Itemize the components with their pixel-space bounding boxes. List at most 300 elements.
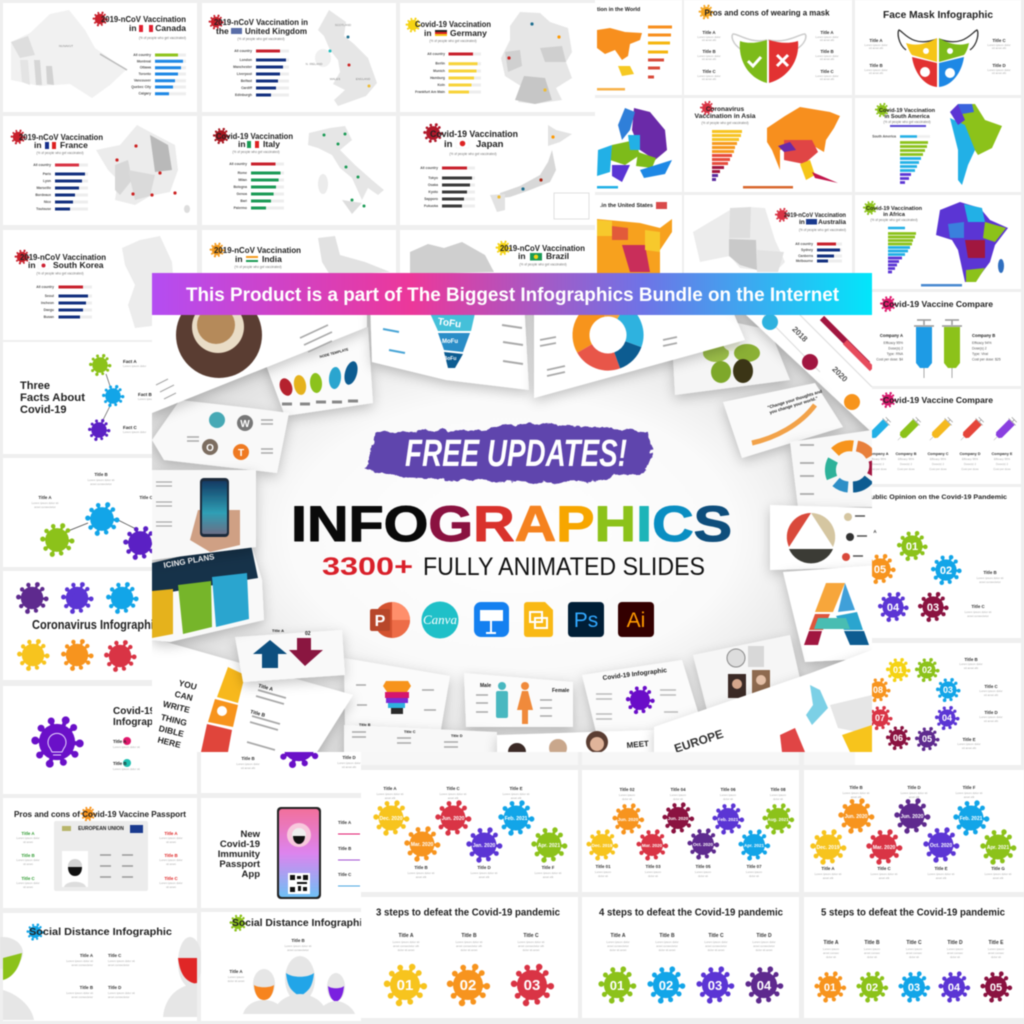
labels: 4 steps: dolor sit amet — [708, 948, 725, 952]
map: United Kingdom: N. IRELAND — [306, 62, 323, 66]
labels: face mask: sit amet elit — [869, 46, 883, 50]
title: vaccine compare: Covid-19 Vaccine Compare — [883, 299, 993, 309]
labels: seven titles: Lorem ipsum dolor sit — [928, 872, 955, 876]
labels: 4 steps: amet consectetur — [753, 944, 775, 948]
slide: vaccination in Japan — [400, 116, 595, 225]
labels: companies: Company A — [868, 452, 889, 456]
labels: 5 steps: amet consec — [947, 951, 964, 955]
bar chart: Asia — [712, 132, 742, 180]
title: Asia: Vaccination in Asia — [694, 113, 756, 120]
labels: seven titles: Lorem ipsum dolor sit — [815, 872, 842, 876]
title: United Kingdom: the — [216, 26, 229, 36]
mini slide: male and female — [464, 673, 573, 727]
labels: mask right: Lorem ipsum dolor — [815, 35, 839, 39]
labels: six titles: amet elit — [511, 796, 522, 800]
map: United States — [597, 219, 672, 280]
timeline viruses: Aug. 2021 — [767, 817, 789, 822]
labels: social distance: Title A — [80, 953, 94, 958]
title: Asia: (% of people who get vaccinated) — [701, 121, 749, 125]
map: world — [597, 28, 642, 76]
mini slide: triangle circle — [770, 505, 872, 570]
bar chart: France: All country — [33, 163, 51, 167]
bar chart: Japan: All country — [420, 166, 438, 170]
mini slide: lower center: Title D — [451, 734, 463, 738]
labels: companies: Efficacy 95% — [870, 457, 887, 461]
mini slide: funnel: ToFu — [437, 316, 462, 331]
title: Covid-19 infographic: Infographic — [113, 717, 168, 728]
mini slide: pricing plans — [152, 540, 264, 642]
labels: companies: Dose(s) 2 — [996, 462, 1009, 466]
virus steps: 4: 04 — [757, 978, 772, 993]
labels: eight titles: Title 02 — [619, 787, 635, 792]
labels: cons: Title C — [164, 876, 178, 881]
mini slide: funnel — [370, 300, 529, 390]
title: South America — [879, 108, 936, 124]
virus steps: 3 — [384, 964, 554, 1006]
labels: lower titles: sit amet elit — [342, 765, 356, 769]
labels: facts: Fact B — [138, 392, 153, 397]
virus steps: 5: 02 — [866, 982, 878, 994]
labels: seven titles: Lorem ipsum dolor sit — [901, 791, 928, 795]
labels: cons: Title A — [164, 831, 178, 836]
labels: companies: Cost per dose — [929, 467, 947, 471]
bar chart: France: Paris — [43, 172, 51, 176]
labels: face mask: Title B — [869, 63, 883, 68]
labels: 3 steps: Lorem ipsum dolor sit — [456, 940, 483, 944]
labels: 4 steps: dolor sit amet — [659, 948, 676, 952]
labels: mask left: Lorem ipsum dolor — [697, 35, 721, 39]
labels: eight step cycle: Title D — [984, 710, 998, 715]
map: Africa — [936, 202, 1008, 282]
labels: companies: Company C — [927, 452, 949, 456]
labels: companies: Cost per dose — [961, 467, 979, 471]
labels: mask right — [815, 30, 839, 81]
title: three facts: Three — [20, 380, 50, 392]
virus steps: 3: 03 — [524, 977, 540, 994]
labels: face mask: Lorem ipsum dolor — [864, 68, 888, 72]
bar chart: Italy: Palermo — [234, 206, 247, 210]
icon: green virus — [40, 523, 74, 557]
map: Canada — [11, 10, 127, 98]
bar chart: South America: South America — [872, 134, 896, 138]
bar chart: Canada: Calgary — [139, 92, 151, 96]
labels: 4 steps — [606, 933, 776, 952]
labels: companies: Dose(s) 2 — [964, 462, 977, 466]
title: wearing a mask: Pros and cons of wearing a mask — [704, 8, 830, 18]
labels: seven titles: Title A — [821, 866, 835, 871]
slide: eight step virus cycle — [855, 643, 1021, 765]
virus cycle: eight steps: 08 — [873, 685, 883, 695]
bar chart: Japan: Kyoto — [428, 190, 438, 194]
title: South Korea: in — [28, 260, 36, 270]
labels: titles: amet consectetur — [90, 482, 112, 486]
bar chart: Japan: Fukuoka — [424, 204, 438, 208]
labels: seven titles: amet elit — [851, 795, 862, 799]
mini slide: light bulb — [344, 658, 450, 735]
bar chart: Japan: Osaka — [428, 183, 438, 187]
bar chart: Italy: Bari — [240, 199, 247, 203]
person: orange mask — [243, 969, 285, 1014]
labels: eight titles: Lorem ipsum — [770, 793, 787, 797]
bar chart: Australia: Melbourne — [796, 259, 813, 263]
icon: Photoshop — [568, 602, 604, 637]
labels: companies: Dose(s) 2 — [872, 462, 885, 466]
labels: eight step cycle: Title E — [962, 737, 976, 742]
virus cycle: five steps: 01 — [906, 541, 918, 553]
labels: dots: Title A — [113, 739, 127, 744]
labels: eight step cycle: sit amet elit — [962, 746, 976, 750]
bar chart: Japan: Sapporo — [424, 197, 438, 201]
phone: immunity passport — [277, 807, 321, 899]
title: France: in — [34, 140, 42, 150]
labels: mask left: Title B — [702, 49, 716, 54]
labels: pros: Title C — [21, 876, 35, 881]
person: green mask — [0, 937, 34, 1020]
title: France: (% of people who get vaccinated) — [36, 151, 84, 155]
labels: 5 steps: dolor sit — [826, 955, 836, 959]
title: Japan — [430, 129, 518, 156]
labels: company A: Dose(s) 2 — [888, 346, 903, 350]
map: United Kingdom: SCOTLAND — [335, 23, 352, 27]
labels: mask right: sit amet elit — [820, 57, 834, 61]
title: 4 steps: 4 steps to defeat the Covid-19 pandemic — [599, 908, 783, 918]
band: slide ends under panel — [361, 752, 855, 765]
virus steps: 4: 02 — [659, 978, 673, 993]
title: Australia: in — [799, 219, 805, 226]
mini slide: you can write: CAN — [174, 689, 194, 703]
labels: six titles: Lorem ipsum dolor sit — [535, 871, 562, 875]
labels: lower titles: Title D — [342, 755, 356, 760]
labels: titles: Lorem ipsum — [228, 975, 245, 979]
labels: cons — [159, 831, 183, 889]
icon: blue virus — [85, 502, 119, 536]
title: vaccine compare: Covid-19 Vaccine Compare — [883, 395, 993, 405]
mini slide: SWOT: T — [238, 448, 244, 459]
title: Italy: in — [238, 139, 246, 149]
icon: Illustrator — [618, 602, 654, 637]
icon: purple virus — [276, 722, 323, 768]
labels: companies: Efficacy 95% — [962, 457, 979, 461]
labels: six titles: Title C — [446, 786, 460, 791]
labels: mask left: Lorem ipsum dolor — [697, 54, 721, 58]
title: Canada: (% of people who get vaccinated) — [139, 36, 186, 40]
labels: company B: Dose(s) 2 — [972, 346, 987, 350]
map: United Kingdom: WALES — [330, 77, 340, 81]
labels: public opinion: amet consectetur — [967, 614, 989, 618]
title: Australia: Australia — [818, 219, 846, 226]
mini slide: green petals — [672, 315, 790, 395]
slide: coronavirus vaccination in Asia — [684, 98, 852, 192]
title: Brazil: Brazil — [546, 251, 569, 261]
bar chart: France: Marseille — [36, 186, 51, 190]
timeline viruses: Dec. 2019 — [816, 845, 840, 851]
labels: 5 steps: Lorem ipsum — [864, 947, 881, 951]
labels: six titles — [377, 786, 562, 879]
labels: six titles: Lorem ipsum dolor sit — [503, 792, 530, 796]
icon: orange virus — [81, 807, 96, 821]
slide: vaccination in India — [202, 230, 396, 280]
slide: vaccination in the World — [595, 0, 682, 95]
mini slide: you can write: Title B — [249, 709, 266, 719]
virus steps: 4: 03 — [708, 978, 722, 993]
slide: vaccination in Australia — [684, 195, 852, 280]
slide: pros and cons of vaccine passport — [3, 798, 197, 908]
labels: titles: Title A — [38, 495, 52, 500]
labels: 5 steps: Title B — [864, 940, 880, 946]
title: Japan: Covid-19 Vaccination — [430, 129, 518, 140]
labels: 4 steps: Title D — [756, 933, 772, 939]
labels: companies: Dose(s) 2 — [932, 462, 945, 466]
title: 5 steps: 5 steps to defeat the Covid-19 pandemic — [821, 908, 1005, 918]
labels: social distance: Lorem ipsum dolor sit — [108, 959, 135, 963]
labels: mask left: Title C — [702, 69, 716, 74]
mini slide: SWOT: O — [206, 443, 214, 454]
labels: companies: Cost per dose — [993, 467, 1011, 471]
slide: social distance infographic right — [201, 912, 368, 1021]
labels: 4 steps: Lorem ipsum dolor — [752, 940, 776, 944]
icon: blue virus — [27, 924, 44, 940]
labels: pros: sit amet — [23, 885, 33, 889]
labels: seven titles: amet elit — [823, 876, 834, 880]
card: European Union passport — [54, 821, 148, 891]
labels: company B: Cost per dose: $25 — [972, 358, 1001, 362]
labels: 4 steps: amet consectetur — [607, 944, 629, 948]
bar chart: United Kingdom: Cardiff — [241, 86, 253, 90]
bar chart: Australia — [795, 242, 842, 263]
bar chart: South Korea: Busan — [44, 315, 54, 319]
icon: purple virus with bulb — [31, 716, 84, 768]
labels: six titles: Lorem ipsum dolor sit — [377, 792, 404, 796]
labels: eight titles: Title 03 — [645, 864, 661, 869]
labels: 5 steps: Title E — [989, 940, 1004, 946]
mini slide: pins — [263, 327, 373, 416]
labels: 5 steps: dolor sit — [867, 955, 877, 959]
title: Brazil: (% of people who get vaccinated) — [519, 262, 567, 266]
title: Italy: Italy — [263, 139, 280, 149]
map: Japan — [490, 125, 589, 219]
labels: company A: Company A — [880, 333, 903, 338]
map: Brazil — [410, 242, 494, 274]
labels: mask left: Title A — [702, 30, 716, 35]
icon: green syringe — [942, 320, 962, 378]
labels: seven titles: amet elit — [964, 795, 975, 799]
bar chart: Canada — [131, 53, 186, 96]
labels: pros: Lorem ipsum dolor — [16, 836, 40, 840]
labels: 3 steps — [393, 933, 545, 952]
labels: titles: Title B — [291, 938, 305, 943]
mini slide: lower center: Title B — [359, 723, 371, 727]
labels: pros: Title A — [21, 831, 35, 836]
person: purple mask — [318, 973, 355, 1014]
virus steps: 3: 01 — [397, 977, 413, 994]
labels: face mask: Title A — [869, 38, 883, 43]
title: Australia — [784, 212, 846, 232]
labels: 4 steps: Lorem ipsum dolor — [606, 940, 630, 944]
timeline viruses — [586, 802, 794, 861]
labels: pros: sit amet — [23, 862, 33, 866]
labels: face mask: sit amet elit — [869, 71, 883, 75]
labels: passport app: Title C — [338, 872, 352, 877]
bar chart: United Kingdom: All country — [234, 49, 252, 53]
labels: cons: sit amet — [166, 885, 176, 889]
virus cycle: five steps: 04 — [887, 602, 900, 614]
labels: mask left: sit amet elit — [702, 77, 716, 81]
mini slide: arrows: Title A — [272, 628, 284, 633]
bar chart: South Korea: All country — [36, 285, 54, 289]
labels: mask left: sit amet elit — [702, 38, 716, 42]
labels: 4 steps: Title B — [659, 933, 675, 939]
labels: face mask: Lorem ipsum dolor — [864, 43, 888, 47]
icon: blue syringe — [914, 320, 934, 378]
labels: 5 steps: Title A — [823, 940, 839, 946]
bar chart: Germany: Munich — [433, 69, 445, 73]
labels: 4 steps: Lorem ipsum dolor — [704, 940, 728, 944]
mini slide: funnel: BoFu — [444, 356, 456, 362]
title: Asia: Coronavirus — [706, 106, 745, 113]
mini slide: quote: "Change your thoughts and — [767, 388, 823, 410]
mini slide: you can write: DIBLE — [158, 723, 185, 739]
mini slide: you can write — [152, 638, 353, 760]
slide: vaccination in Brazil — [400, 230, 595, 280]
mini slide: SWOT: W — [240, 419, 250, 430]
timeline viruses: Apr. 2021 — [987, 845, 1009, 851]
labels: eight titles: Title 04 — [670, 787, 686, 792]
labels: public opinion: amet consectetur — [979, 580, 1001, 584]
title: India: 2019-nCoV Vaccination — [214, 245, 301, 255]
labels: seven titles: amet elit — [936, 876, 947, 880]
labels: companies: Company D — [959, 452, 981, 456]
title: Africa: Covid-19 Vaccination — [866, 206, 923, 212]
bar chart: Germany: Berlin — [435, 62, 445, 66]
slide: vaccine compare with five syringes — [855, 389, 1021, 484]
timeline viruses: Apr. 2021 — [538, 843, 560, 849]
virus steps: 5: 04 — [948, 982, 961, 994]
labels: dots: Title B — [113, 761, 127, 766]
labels: eight step cycle: Lorem ipsum dolor — [957, 742, 981, 746]
icon: purple virus — [88, 419, 110, 441]
title: South America: in South America — [884, 114, 930, 120]
labels: social distance: amet consectetur — [72, 963, 93, 967]
title: three facts: Facts About — [20, 392, 85, 404]
mini slide: timeline band — [736, 314, 873, 432]
bar chart: United Kingdom — [233, 49, 289, 97]
timeline viruses: Jun. 2020 — [442, 816, 465, 822]
map: South America — [950, 104, 1002, 185]
bar chart: world lower bars — [648, 43, 670, 52]
slide: vaccination in United Kingdom — [202, 3, 396, 112]
bar chart: world last bars — [648, 60, 664, 77]
labels: facts: Lorem ipsum dolor — [123, 364, 146, 368]
labels: eight titles: dolor sit — [622, 797, 632, 801]
bar chart: Italy: Genoa — [236, 192, 247, 196]
title: India: in — [235, 254, 243, 264]
bar chart: South Korea: Daegu — [44, 308, 54, 312]
labels: six titles: Lorem ipsum dolor sit — [471, 871, 498, 875]
bar chart: Australia: All country — [795, 242, 813, 246]
subtitle: fully animated slides: FULLY ANIMATED SLIDES — [423, 553, 705, 581]
mini slide: lower center: Title C — [404, 730, 416, 734]
title: Japan: in — [444, 139, 453, 150]
labels: cons: Title B — [164, 853, 178, 858]
labels: seven titles: amet elit — [993, 876, 1004, 880]
timeline viruses: Apr. 2021 — [744, 843, 765, 848]
banner: This Product is a part of The Biggest Infographics Bundle on the Internet — [186, 285, 840, 306]
labels: seven titles: amet elit — [909, 795, 920, 799]
bar chart: France: Bordeaux — [35, 193, 51, 197]
map: United Kingdom: ENGLAND — [356, 77, 371, 81]
title: France — [19, 132, 103, 155]
timeline viruses: Oct. 2020 — [930, 843, 952, 849]
map: Germany — [501, 12, 572, 104]
labels: eight titles: Lorem ipsum — [746, 870, 763, 874]
title: coronavirus infographic: Coronavirus Infographic — [32, 618, 160, 632]
legend strip: world — [597, 88, 625, 90]
mini slide: funnel: MoFu — [442, 339, 458, 345]
labels: 5 steps: amet consec — [823, 951, 840, 955]
title: social distance: Social Distance Infographic — [232, 917, 368, 929]
title: Africa — [866, 206, 923, 222]
labels: 5 steps: dolor sit — [909, 955, 919, 959]
labels: six titles: Title B — [414, 865, 428, 870]
labels: titles: amet consectetur — [287, 948, 309, 952]
labels: 5 steps: Lorem ipsum — [823, 947, 840, 951]
map: Italy — [308, 126, 384, 214]
labels: company A: Type: RNA — [887, 352, 904, 356]
title: Germany: Covid-19 Vaccination — [415, 19, 491, 29]
timeline viruses: Feb. 2021 — [505, 816, 528, 822]
labels: 4 steps: Title C — [708, 933, 724, 939]
labels: six titles: amet elit — [385, 796, 396, 800]
title: Canada: Canada — [155, 23, 186, 33]
virus steps: 5: 05 — [990, 982, 1002, 994]
slide: vaccination in Italy — [202, 116, 396, 225]
labels: seven titles: Lorem ipsum dolor sit — [843, 791, 870, 795]
labels: companies: Dose(s) 2 — [900, 462, 913, 466]
title: United Kingdom: United Kingdom — [245, 26, 307, 36]
slide: public opinion — [855, 487, 1021, 638]
labels: 5 steps: Title C — [906, 940, 922, 946]
labels: mask right: Lorem ipsum dolor — [815, 74, 839, 78]
labels: eight step cycle: Lorem ipsum dolor — [979, 689, 1003, 693]
timeline viruses: Feb. 2021 — [960, 816, 983, 822]
labels: eight step cycle: Lorem ipsum dolor — [979, 715, 1003, 719]
labels: company B: Type: Viral — [972, 352, 988, 356]
bar chart: United Kingdom: Manchester — [233, 65, 253, 69]
bar chart: Germany — [415, 52, 481, 94]
bar chart: Germany: Frankfurt Am Main — [415, 90, 445, 94]
labels: six titles: amet elit — [479, 875, 490, 879]
bar chart: South Korea — [36, 285, 92, 319]
labels: 5 steps: dolor sit — [991, 955, 1001, 959]
bar chart: South Korea: Seoul — [45, 294, 54, 298]
labels: public opinion: Lorem ipsum dolor sit — [965, 610, 992, 614]
labels: dots: Lorem ipsum dolor sit — [113, 745, 140, 749]
bar chart: Canada: Vancouver — [134, 79, 152, 83]
bar chart: Italy: Bologna — [233, 185, 247, 189]
map: India — [318, 236, 390, 275]
title: Canada: in — [129, 23, 137, 33]
bar chart: Australia: Sydney — [801, 248, 813, 252]
title: Japan: Japan — [476, 139, 504, 150]
labels: cons: sit amet — [166, 840, 176, 844]
labels: social distance: amet consectetur — [108, 963, 130, 967]
labels: titles: amet consectetur — [34, 505, 56, 509]
slide: 4 steps — [582, 897, 799, 1018]
icon: green virus — [875, 103, 889, 117]
labels: social distance: Title D — [108, 985, 121, 990]
labels: cons: Lorem ipsum dolor — [159, 881, 183, 885]
labels: 5 steps: Lorem ipsum — [906, 947, 923, 951]
